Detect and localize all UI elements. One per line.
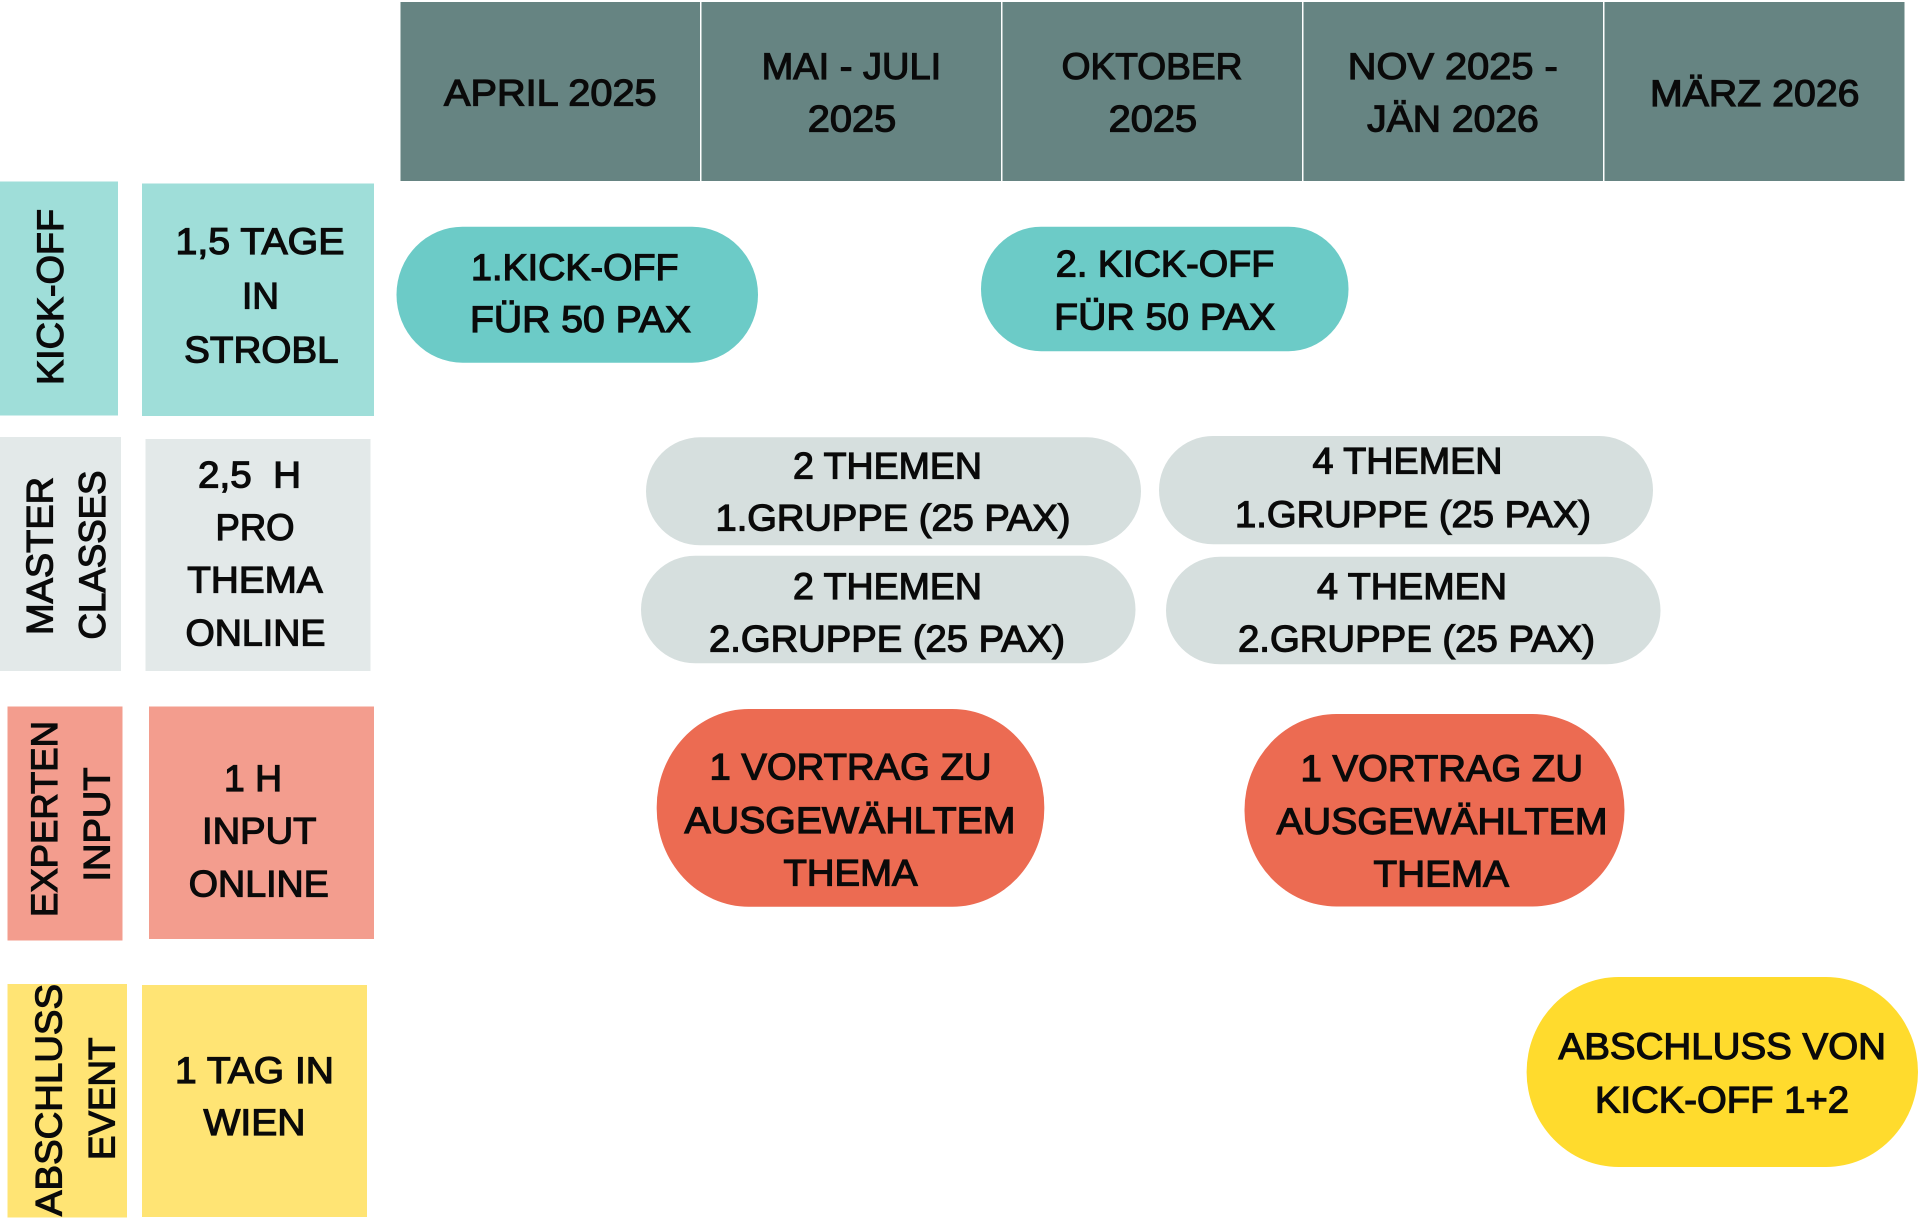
header cell: Mai - Juli 2025 bbox=[702, 2, 1001, 181]
duration box: 1 h Input online: ONLINE bbox=[189, 863, 329, 904]
pill: 2 Themen Gruppe 2: 2.GRUPPE (25 PAX) bbox=[709, 618, 1065, 659]
panel: master classes row labels bbox=[0, 437, 370, 671]
header cell: Mai - Juli 2025: MAI - JULI bbox=[762, 46, 941, 87]
pill: Vortrag 2: AUSGEWÄHLTEM bbox=[1277, 801, 1608, 842]
header cell: Maerz 2026: MÄRZ 2026 bbox=[1650, 73, 1860, 114]
category label: Kick-off: KICK-OFF bbox=[30, 209, 71, 385]
pill: 1. Kick-off: 1.KICK-OFF bbox=[471, 247, 679, 288]
header cell: Maerz 2026 bbox=[1604, 2, 1904, 181]
pill: Vortrag 1: AUSGEWÄHLTEM bbox=[684, 800, 1016, 841]
duration box: 2,5 h pro Thema online bbox=[146, 439, 370, 671]
category label: Master Classes bbox=[0, 437, 121, 671]
header cell: Nov 2025 - Jan 2026: JÄN 2026 bbox=[1367, 99, 1539, 140]
category label: Abschluss Event bbox=[8, 984, 127, 1218]
pill: 2 Themen Gruppe 1 bbox=[646, 437, 1141, 545]
pill: Vortrag 1: THEMA bbox=[784, 852, 918, 894]
pill: 1. Kick-off bbox=[396, 227, 758, 363]
header cell: April 2025 bbox=[400, 2, 700, 181]
header cell: Nov 2025 - Jan 2026: NOV 2025 - bbox=[1348, 46, 1558, 87]
duration box: 1,5 Tage in Strobl: 1,5 TAGE bbox=[176, 221, 344, 262]
duration box: 1 h Input online bbox=[149, 706, 374, 939]
pill: Vortrag 1 bbox=[657, 709, 1044, 907]
pill: 2 Themen Gruppe 1: 1.GRUPPE (25 PAX) bbox=[716, 498, 1070, 539]
panel: kick-off row labels bbox=[0, 182, 374, 416]
duration box: 2,5 h pro Thema online: 2,5 H bbox=[198, 454, 301, 496]
pill: Abschluss: ABSCHLUSS VON bbox=[1558, 1026, 1886, 1067]
category label: Master Classes: MASTER bbox=[20, 477, 60, 635]
pill: 2 Themen Gruppe 2: 2 THEMEN bbox=[793, 566, 982, 607]
panel: abschluss event row labels bbox=[8, 984, 367, 1218]
panel: experten input row labels bbox=[8, 706, 374, 940]
pill: Vortrag 2 bbox=[1244, 714, 1624, 906]
pill: 4 Themen Gruppe 1 bbox=[1159, 436, 1653, 544]
header cell: April 2025: APRIL 2025 bbox=[444, 73, 657, 114]
duration box: 2,5 h pro Thema online: THEMA bbox=[187, 559, 323, 600]
pill: Vortrag 1: 1 VORTRAG ZU bbox=[710, 746, 992, 788]
pill: Vortrag 2: 1 VORTRAG ZU bbox=[1300, 748, 1583, 789]
duration box: 1,5 Tage in Strobl: STROBL bbox=[184, 330, 339, 371]
header cell: Oktober 2025: 2025 bbox=[1109, 99, 1197, 140]
duration box: 2,5 h pro Thema online: ONLINE bbox=[186, 612, 326, 653]
duration box: 1 h Input online: 1 H bbox=[224, 758, 282, 799]
header cell: Mai - Juli 2025: 2025 bbox=[808, 99, 896, 140]
pill: 4 Themen Gruppe 2 bbox=[1166, 557, 1660, 664]
header cell: Oktober 2025 bbox=[1002, 2, 1302, 181]
pill: 1. Kick-off: FÜR 50 PAX bbox=[470, 299, 691, 340]
duration box: 1 Tag in Wien: WIEN bbox=[204, 1102, 306, 1143]
duration box: 1,5 Tage in Strobl: IN bbox=[242, 275, 279, 316]
category label: Experten Input: EXPERTEN bbox=[24, 721, 65, 917]
pill: 2. Kick-off: 2. KICK-OFF bbox=[1056, 244, 1274, 285]
category label: Experten Input bbox=[8, 706, 122, 940]
category label: Kick-off bbox=[0, 182, 118, 416]
duration box: 1 Tag in Wien bbox=[142, 985, 367, 1217]
pill: Abschluss: KICK-OFF 1+2 bbox=[1595, 1080, 1849, 1121]
category label: Abschluss Event: EVENT bbox=[81, 1038, 122, 1160]
header cell: Oktober 2025: OKTOBER bbox=[1062, 46, 1242, 87]
duration box: 1 h Input online: INPUT bbox=[202, 811, 316, 852]
pill: Abschluss bbox=[1527, 977, 1918, 1167]
pill: 4 Themen Gruppe 1: 4 THEMEN bbox=[1312, 440, 1502, 482]
duration box: 2,5 h pro Thema online: PRO bbox=[216, 507, 294, 548]
pill: Vortrag 2: THEMA bbox=[1374, 853, 1509, 894]
pill: 2. Kick-off: FÜR 50 PAX bbox=[1054, 296, 1275, 337]
pill: 4 Themen Gruppe 2: 4 THEMEN bbox=[1317, 566, 1507, 607]
panel: month header row bbox=[400, 2, 1904, 181]
category label: Master Classes: CLASSES bbox=[72, 470, 113, 640]
pill: 4 Themen Gruppe 1: 1.GRUPPE (25 PAX) bbox=[1235, 494, 1591, 535]
duration box: 1,5 Tage in Strobl bbox=[142, 184, 374, 416]
pill: 2. Kick-off bbox=[981, 227, 1348, 351]
category label: Abschluss Event: ABSCHLUSS bbox=[29, 984, 70, 1216]
header cell: Nov 2025 - Jan 2026 bbox=[1304, 2, 1603, 181]
duration box: 1 Tag in Wien: 1 TAG IN bbox=[175, 1050, 334, 1091]
category label: Experten Input: INPUT bbox=[77, 768, 118, 882]
pill: 2 Themen Gruppe 1: 2 THEMEN bbox=[793, 446, 982, 486]
pill: 2 Themen Gruppe 2 bbox=[641, 556, 1136, 663]
pill: 4 Themen Gruppe 2: 2.GRUPPE (25 PAX) bbox=[1238, 618, 1595, 659]
